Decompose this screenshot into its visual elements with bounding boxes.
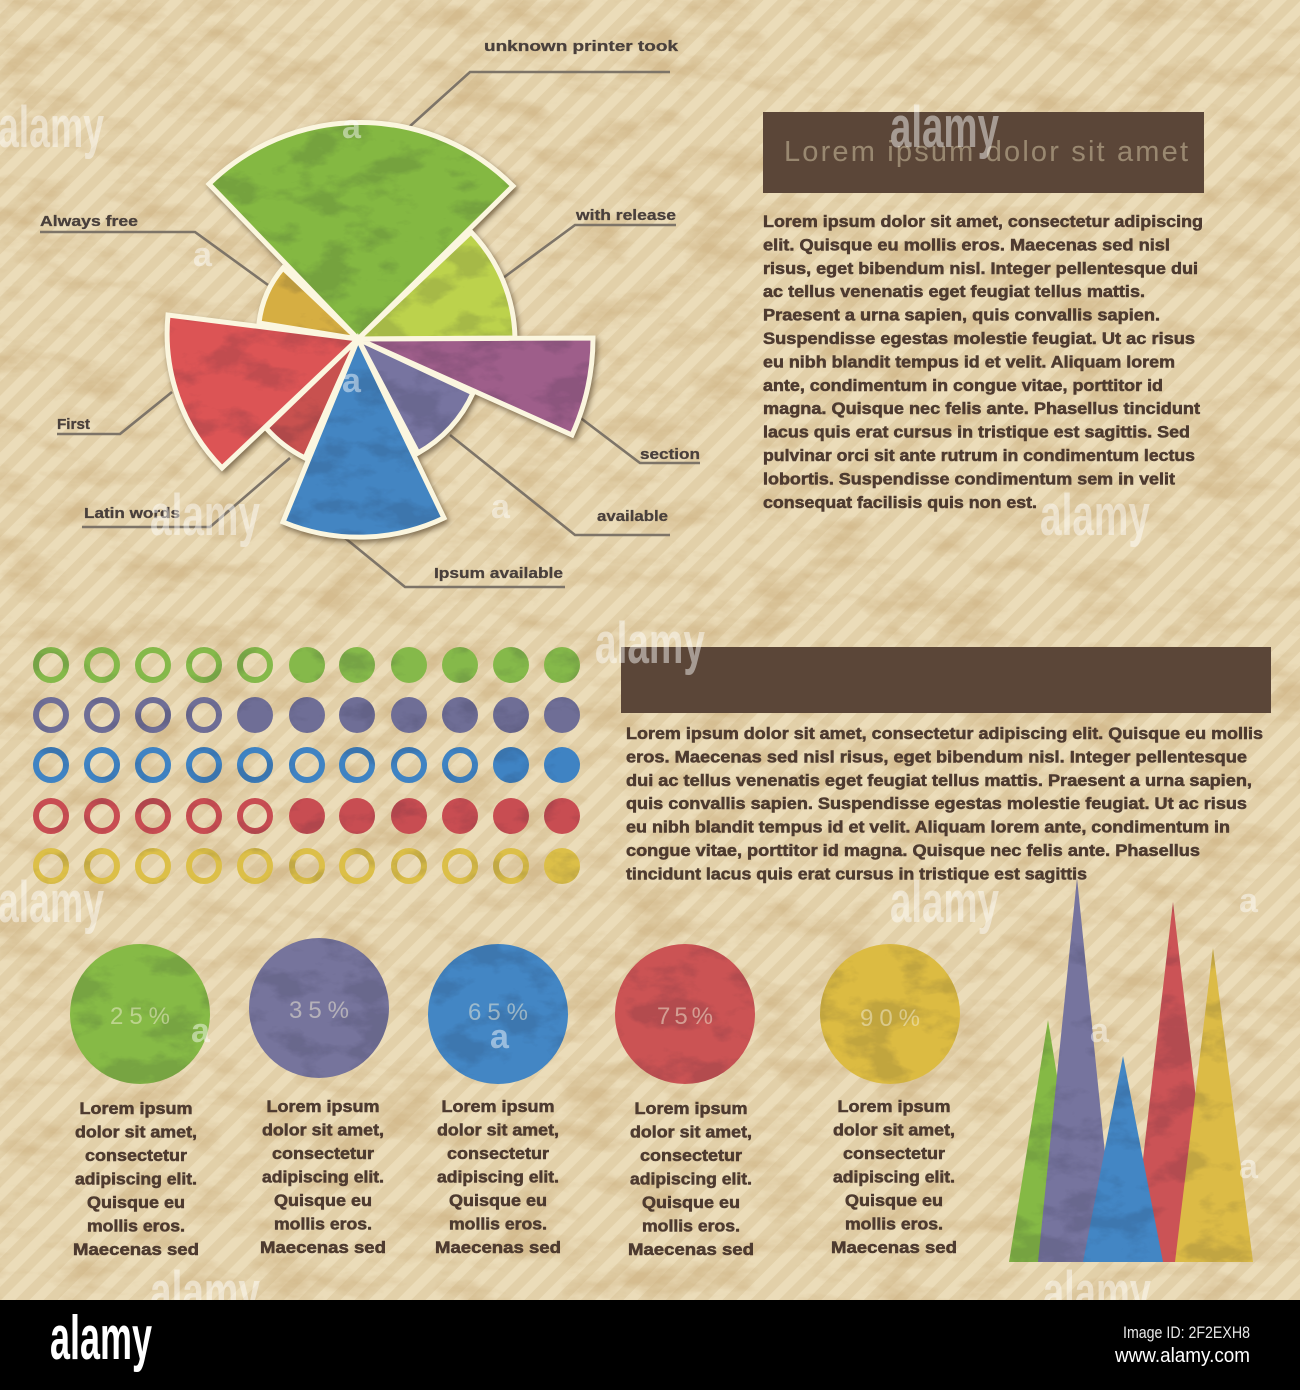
sector: blue <box>283 339 444 537</box>
circle: 75% <box>615 944 755 1084</box>
text block middle: Lorem ipsum dolor sit amet, consectetur adipiscing elit. Quisque eu mollis <box>626 725 1263 743</box>
caption 3: mollis eros. <box>449 1216 547 1234</box>
watermarks: a <box>191 1012 211 1050</box>
text block top: magna. Quisque nec felis ante. Phasellus tincidunt <box>763 400 1201 418</box>
text block middle: eros. Maecenas sed nisl risus, eget bibendum nisl. Integer pellentesque <box>626 748 1247 766</box>
caption 2: dolor sit amet, <box>262 1122 384 1140</box>
text block top <box>763 213 1203 512</box>
watermarks: alamy <box>0 870 104 935</box>
caption 2: Maecenas sed <box>260 1239 386 1257</box>
text block middle <box>626 725 1263 883</box>
caption 2 <box>260 1098 386 1257</box>
caption 4: dolor sit amet, <box>630 1124 752 1142</box>
caption 4: mollis eros. <box>642 1218 740 1236</box>
caption 5: Quisque eu <box>845 1192 943 1210</box>
watermarks: alamy <box>150 483 260 548</box>
caption 3: adipiscing elit. <box>437 1168 559 1186</box>
text block top: Lorem ipsum dolor sit amet, consectetur adipiscing <box>763 213 1203 231</box>
watermarks: a <box>1090 1012 1110 1050</box>
percentage circles <box>70 938 960 1084</box>
pie sectors <box>167 122 593 537</box>
caption 3 <box>435 1098 561 1257</box>
caption 4: Maecenas sed <box>628 1241 754 1259</box>
sector: ochre <box>259 268 358 339</box>
watermarks: alamy <box>595 611 705 676</box>
dot row: yellow <box>36 848 580 884</box>
text block top: ante, condimentum in congue vitae, porttitor id <box>763 377 1163 395</box>
caption 3: dolor sit amet, <box>437 1122 559 1140</box>
dot row: slate <box>36 697 580 733</box>
text block top: consequat facilisis quis non est. <box>763 494 1037 512</box>
watermarks: alamy <box>0 95 104 160</box>
caption 2: mollis eros. <box>274 1216 372 1234</box>
watermarks: a <box>1239 882 1259 920</box>
callout: First <box>57 392 172 434</box>
caption 5: mollis eros. <box>845 1216 943 1234</box>
circle: 35% <box>249 938 389 1078</box>
footer logo: alamy <box>50 1304 152 1373</box>
callout: available <box>450 435 670 535</box>
text block top: Praesent a urna sapien, quis convallis sapien. <box>763 307 1160 325</box>
watermarks: alamy <box>150 1260 260 1325</box>
circle: 65%: 65% <box>468 999 528 1026</box>
caption 2: adipiscing elit. <box>262 1168 384 1186</box>
callout: available: available <box>597 509 668 525</box>
callout: Ipsum available <box>345 538 565 587</box>
circle: 90%: 90% <box>860 1005 920 1032</box>
caption 1: Maecenas sed <box>73 1241 199 1259</box>
watermarks: a <box>342 362 362 400</box>
caption 5: adipiscing elit. <box>833 1168 955 1186</box>
caption 5: consectetur <box>843 1145 946 1163</box>
heading bar middle <box>621 647 1271 713</box>
caption 1: consectetur <box>85 1147 188 1165</box>
caption 4: Quisque eu <box>642 1194 740 1212</box>
dot matrix <box>36 647 580 884</box>
heading bar top: Lorem ipsum dolor sit amet <box>784 136 1188 168</box>
text block top: lacus quis erat cursus in tristique est sagittis. Sed <box>763 424 1190 442</box>
triangle: yellow <box>1175 948 1253 1262</box>
caption 1: dolor sit amet, <box>75 1124 197 1142</box>
text block top: Suspendisse egestas molestie feugiat. Ut ac risus <box>763 330 1195 348</box>
watermarks: a <box>491 488 511 526</box>
caption 3: Quisque eu <box>449 1192 547 1210</box>
circle: 35%: 35% <box>289 997 349 1024</box>
sector: red <box>167 315 358 468</box>
sector: lime <box>358 232 515 339</box>
watermarks: a <box>490 1018 510 1056</box>
sector: green <box>209 122 513 339</box>
callout: Always free <box>40 214 268 285</box>
triangle: red <box>1131 902 1215 1262</box>
caption 1 <box>73 1100 199 1259</box>
caption 4 <box>628 1100 754 1259</box>
caption 2: Lorem ipsum <box>266 1098 380 1116</box>
callout: section <box>578 416 700 463</box>
callout: section: section <box>640 447 700 463</box>
circle: 75%: 75% <box>657 1003 713 1030</box>
footer band <box>0 1300 1300 1390</box>
caption 5 <box>831 1098 957 1257</box>
text block top: pulvinar orci sit ante rutrum in condimentum lectus <box>763 447 1195 465</box>
triangle: blue <box>1083 1056 1163 1262</box>
caption 5: dolor sit amet, <box>833 1122 955 1140</box>
text block top: eu nibh blandit tempus id et velit. Aliquam lorem <box>763 353 1175 371</box>
text block middle: quis convallis sapien. Suspendisse egestas molestie feugiat. Ut ac risus <box>626 795 1247 813</box>
text block top: lobortis. Suspendisse condimentum sem in velit <box>763 470 1176 488</box>
circle: 25%: 25% <box>110 1003 170 1030</box>
callout: Latin words: Latin words <box>84 506 180 522</box>
caption 1: adipiscing elit. <box>75 1170 197 1188</box>
dot row: red <box>36 798 580 834</box>
image id: Image ID: 2F2EXH8 <box>1123 1323 1250 1342</box>
caption 4: consectetur <box>640 1147 743 1165</box>
caption 2: Quisque eu <box>274 1192 372 1210</box>
watermarks: alamy <box>890 870 999 935</box>
heading bar top <box>763 112 1204 193</box>
caption 1: mollis eros. <box>87 1218 185 1236</box>
circle: 65% <box>428 944 568 1084</box>
triangle: green <box>1009 1020 1087 1262</box>
caption 3: Maecenas sed <box>435 1239 561 1257</box>
callout: Always free: Always free <box>40 214 138 230</box>
caption 1: Quisque eu <box>87 1194 185 1212</box>
caption 1: Lorem ipsum <box>80 1100 192 1118</box>
sector: purple <box>358 338 593 435</box>
callout: unknown printer took: unknown printer took <box>484 39 679 55</box>
website: www.alamy.com <box>1114 1345 1250 1367</box>
text block middle: tincidunt lacus quis erat cursus in tristique est sagittis <box>626 865 1087 883</box>
dot row: green <box>36 647 580 683</box>
caption 5: Lorem ipsum <box>838 1098 950 1116</box>
circle: 90% <box>820 944 960 1084</box>
sector: dark red <box>266 339 358 458</box>
callout: with release: with release <box>575 208 676 224</box>
caption 2: consectetur <box>272 1145 375 1163</box>
watermarks: alamy <box>1043 1260 1151 1325</box>
watermarks: a <box>1239 1148 1259 1186</box>
triangle chart <box>1009 878 1253 1262</box>
dot row: blue <box>36 747 580 783</box>
text block top: ac tellus venenatis eget feugiat tellus mattis. <box>763 283 1145 301</box>
watermarks: alamy <box>890 95 999 160</box>
caption 5: Maecenas sed <box>831 1239 957 1257</box>
watermarks: a <box>342 108 362 146</box>
callout: First: First <box>57 417 90 433</box>
text block top: risus, eget bibendum nisl. Integer pellentesque dui <box>763 260 1198 278</box>
callout: unknown printer took <box>408 39 679 128</box>
callout: Latin words <box>82 458 290 527</box>
text block top: elit. Quisque eu mollis eros. Maecenas sed nisl <box>763 236 1170 254</box>
callout: with release <box>503 208 676 278</box>
callout: Ipsum available: Ipsum available <box>434 566 563 582</box>
circle captions <box>73 1098 957 1259</box>
pie chart with callouts <box>40 39 700 587</box>
text block middle: eu nibh blandit tempus id et velit. Aliquam lorem ante, condimentum in <box>626 819 1230 837</box>
circle: 25% <box>70 944 210 1084</box>
sector: slate <box>358 339 473 453</box>
caption 4: adipiscing elit. <box>630 1170 752 1188</box>
caption 3: Lorem ipsum <box>442 1098 554 1116</box>
text block middle: congue vitae, porttitor id magna. Quisque nec felis ante. Phasellus <box>626 842 1200 860</box>
text block middle: dui ac tellus venenatis eget feugiat tellus mattis. Praesent a urna sapien, <box>626 772 1252 790</box>
triangle: slate <box>1038 878 1116 1262</box>
watermarks: a <box>193 236 213 274</box>
caption 3: consectetur <box>447 1145 550 1163</box>
caption 4: Lorem ipsum <box>634 1100 748 1118</box>
watermarks: alamy <box>1040 483 1150 548</box>
